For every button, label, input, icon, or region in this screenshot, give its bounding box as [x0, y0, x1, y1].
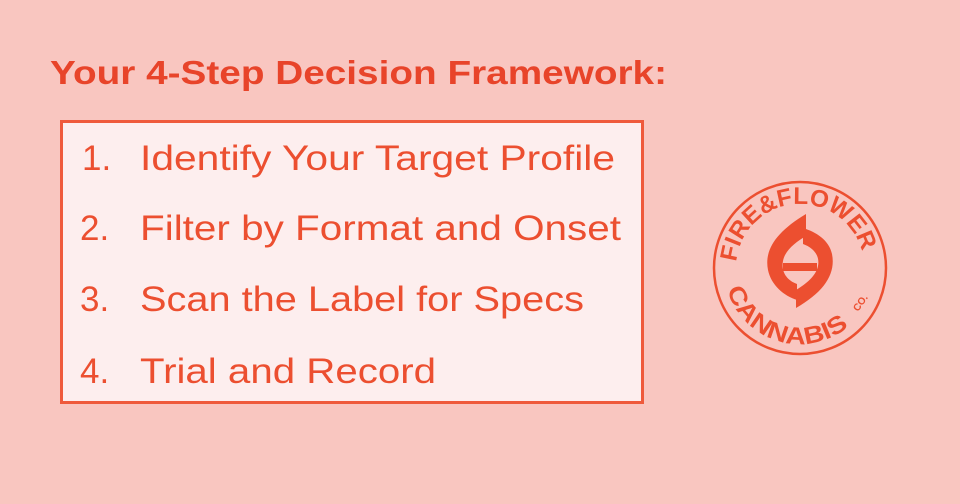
step 2: 2.: [80, 209, 109, 248]
step 4: 4.: [80, 352, 109, 391]
panel: steps list: [62, 122, 642, 402]
title: Your 4-Step Decision Framework:: [50, 54, 667, 91]
logo: Fire & Flower Cannabis Co.: CANNABIS: [730, 286, 846, 344]
logo: Fire & Flower Cannabis Co.: FIRE&FLOWER: [720, 187, 876, 260]
step 2: Filter by Format and Onset: [140, 209, 621, 248]
step 3: Scan the Label for Specs: [140, 280, 584, 319]
icon: flame mark: [767, 214, 806, 300]
step 3: 3.: [80, 280, 109, 319]
logo: Fire & Flower Cannabis Co.: [712, 180, 888, 356]
step 1: 1.: [82, 139, 111, 178]
step 4: Trial and Record: [140, 352, 436, 391]
logo: Fire & Flower Cannabis Co.: CO.: [851, 293, 871, 314]
step 1: Identify Your Target Profile: [140, 139, 615, 178]
